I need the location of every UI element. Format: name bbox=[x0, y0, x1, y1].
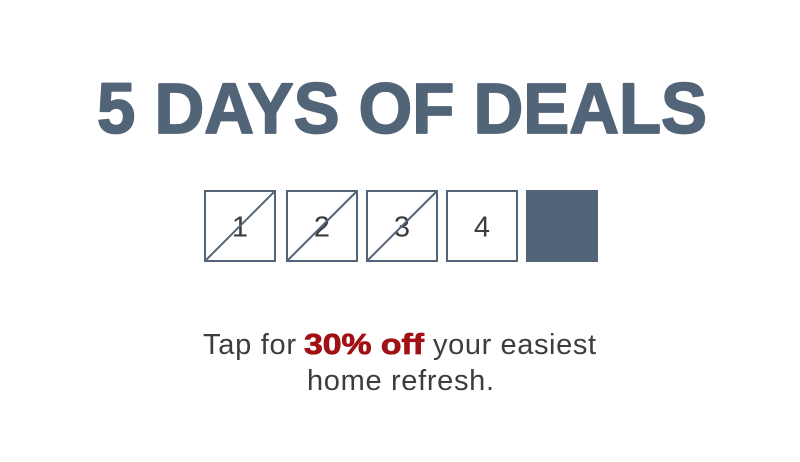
offer line 1 start: Tap for bbox=[203, 329, 296, 361]
day 4 box bbox=[447, 191, 517, 261]
day 1 box, crossed out bbox=[205, 191, 275, 261]
countdown boxes bbox=[205, 190, 598, 262]
day 3 box, crossed out bbox=[367, 191, 437, 261]
day 1 box, crossed out: 1 bbox=[232, 212, 248, 244]
offer line 2: home refresh. bbox=[307, 365, 494, 397]
day 2 box, crossed out bbox=[287, 191, 357, 261]
day 4 box: 4 bbox=[474, 212, 490, 244]
day 2 box, crossed out: 2 bbox=[314, 212, 330, 244]
offer text bbox=[203, 329, 596, 397]
offer highlight: 30% off bbox=[304, 329, 424, 361]
day 3 box, crossed out: 3 bbox=[394, 212, 410, 244]
offer line 1 end: your easiest bbox=[433, 329, 596, 361]
title: 5 DAYS OF DEALS bbox=[97, 70, 707, 149]
day 5 box, filled bbox=[526, 190, 598, 262]
